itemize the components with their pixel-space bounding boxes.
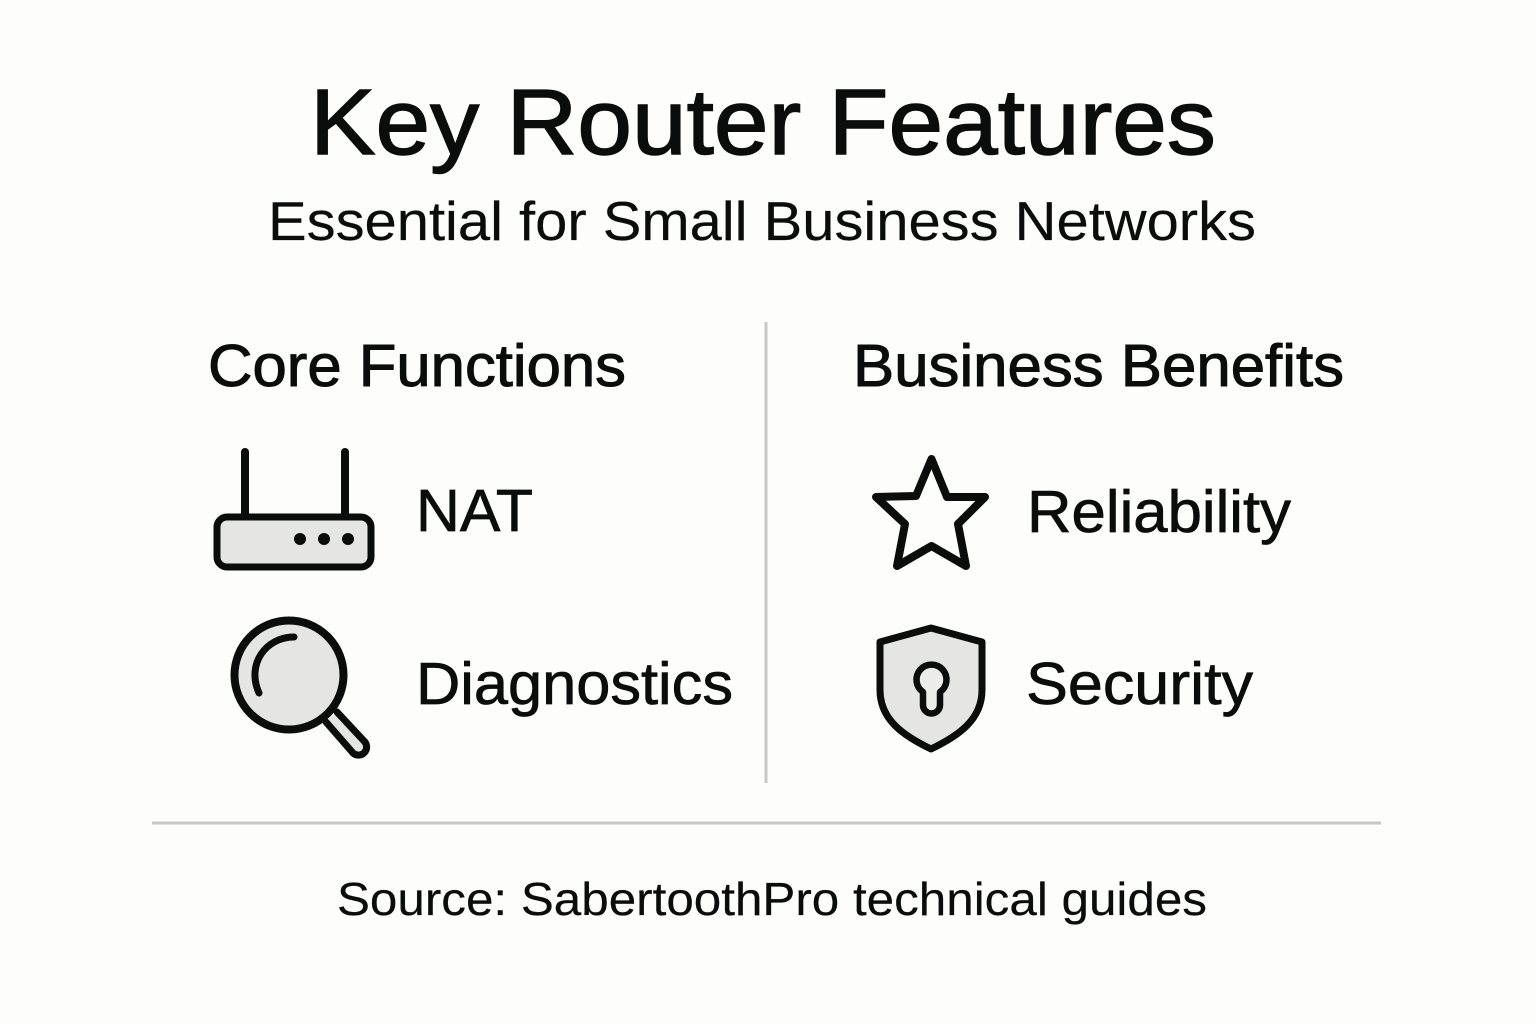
title: Key Router Features bbox=[310, 70, 1216, 174]
label: diagnostics: Diagnostics bbox=[416, 651, 733, 717]
panel: business benefits bbox=[853, 333, 1344, 749]
heading: core functions: Core Functions bbox=[208, 333, 626, 399]
label: security: Security bbox=[1026, 651, 1254, 717]
icon: star bbox=[876, 459, 985, 566]
panel: core functions bbox=[208, 333, 733, 755]
subtitle: Essential for Small Business Networks bbox=[268, 190, 1256, 252]
label: reliability: Reliability bbox=[1027, 479, 1292, 545]
icon: router bbox=[217, 452, 371, 567]
icon: magnifying glass bbox=[234, 620, 367, 755]
heading: business benefits: Business Benefits bbox=[853, 333, 1344, 399]
icon: shield with keyhole bbox=[880, 628, 982, 749]
label: NAT: NAT bbox=[416, 478, 533, 544]
source note: Source: SabertoothPro technical guides bbox=[337, 873, 1207, 925]
